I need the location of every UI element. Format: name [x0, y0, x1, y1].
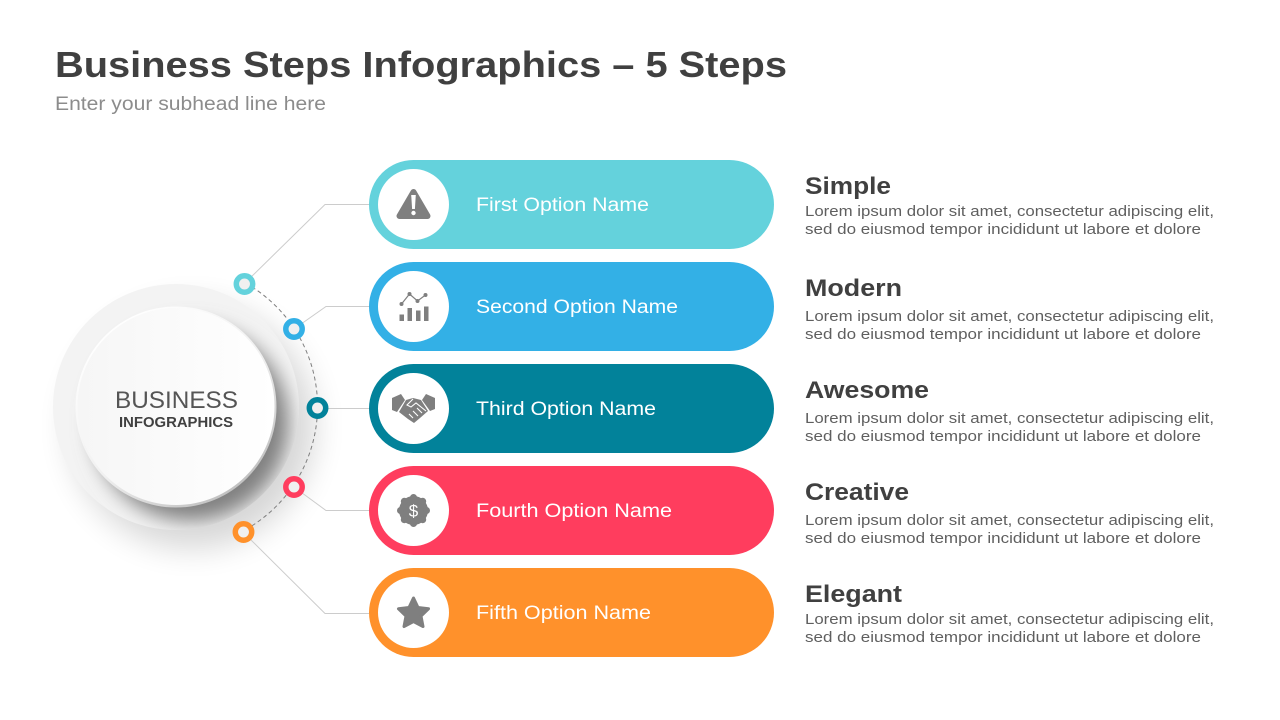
- description: modern: [805, 275, 1214, 343]
- description: creative: sed do eiusmod tempor incididunt ut labore et dolore: [805, 530, 1201, 547]
- step 5 option name: Fifth Option Name: [476, 603, 651, 624]
- description: awesome: Lorem ipsum dolor sit amet, consectetur adipiscing elit,: [805, 410, 1214, 427]
- icon: star: [398, 598, 428, 626]
- step 4 pill: [369, 466, 774, 555]
- description: creative: Creative: [805, 479, 909, 506]
- description: elegant: Lorem ipsum dolor sit amet, consectetur adipiscing elit,: [805, 611, 1214, 628]
- inner disc: [76, 306, 276, 508]
- description: simple: [805, 173, 1214, 238]
- description: modern: sed do eiusmod tempor incididunt ut labore et dolore: [805, 326, 1201, 343]
- central circle: [50, 280, 314, 548]
- description: modern: Modern: [805, 275, 902, 302]
- step 4 option name: Fourth Option Name: [476, 501, 672, 522]
- step 1 option name: First Option Name: [476, 195, 649, 216]
- description: elegant: sed do eiusmod tempor incididunt ut labore et dolore: [805, 629, 1201, 646]
- description: creative: [805, 479, 1214, 547]
- description: elegant: [805, 581, 1214, 646]
- step 3 option name: Third Option Name: [476, 399, 656, 420]
- icon: gear with dollar: [397, 494, 430, 527]
- icon: handshake: [392, 394, 435, 423]
- subhead: Enter your subhead line here: [55, 94, 326, 115]
- description: awesome: [805, 377, 1214, 445]
- step 2 pill: [369, 262, 774, 351]
- description: creative: Lorem ipsum dolor sit amet, consectetur adipiscing elit,: [805, 512, 1214, 529]
- description: simple: sed do eiusmod tempor incididunt ut labore et dolore: [805, 221, 1201, 238]
- step 5 pill: [369, 568, 774, 657]
- node dots: [235, 276, 326, 540]
- description: simple: Simple: [805, 173, 891, 200]
- description: modern: Lorem ipsum dolor sit amet, consectetur adipiscing elit,: [805, 308, 1214, 325]
- outer disc: [50, 280, 302, 534]
- title: Business Steps Infographics – 5 Steps: [55, 44, 787, 85]
- soft drop shadow: [70, 304, 314, 548]
- step 3 pill: [369, 364, 774, 453]
- step 2 option name: Second Option Name: [476, 297, 678, 318]
- dashed arc: [250, 287, 318, 527]
- description: awesome: Awesome: [805, 377, 929, 404]
- center label business: BUSINESS: [115, 387, 238, 414]
- step 1 pill: [369, 160, 774, 249]
- description: awesome: sed do eiusmod tempor incididunt ut labore et dolore: [805, 428, 1201, 445]
- icon: warning: [400, 192, 428, 216]
- icon: gear with dollar: $: [409, 502, 419, 520]
- center label infographics: INFOGRAPHICS: [119, 415, 233, 431]
- infographic canvas: [53, 50, 1213, 657]
- connector lines: [243, 204, 369, 614]
- description: elegant: Elegant: [805, 581, 902, 608]
- icon: chart: [400, 292, 428, 321]
- description: simple: Lorem ipsum dolor sit amet, consectetur adipiscing elit,: [805, 203, 1214, 220]
